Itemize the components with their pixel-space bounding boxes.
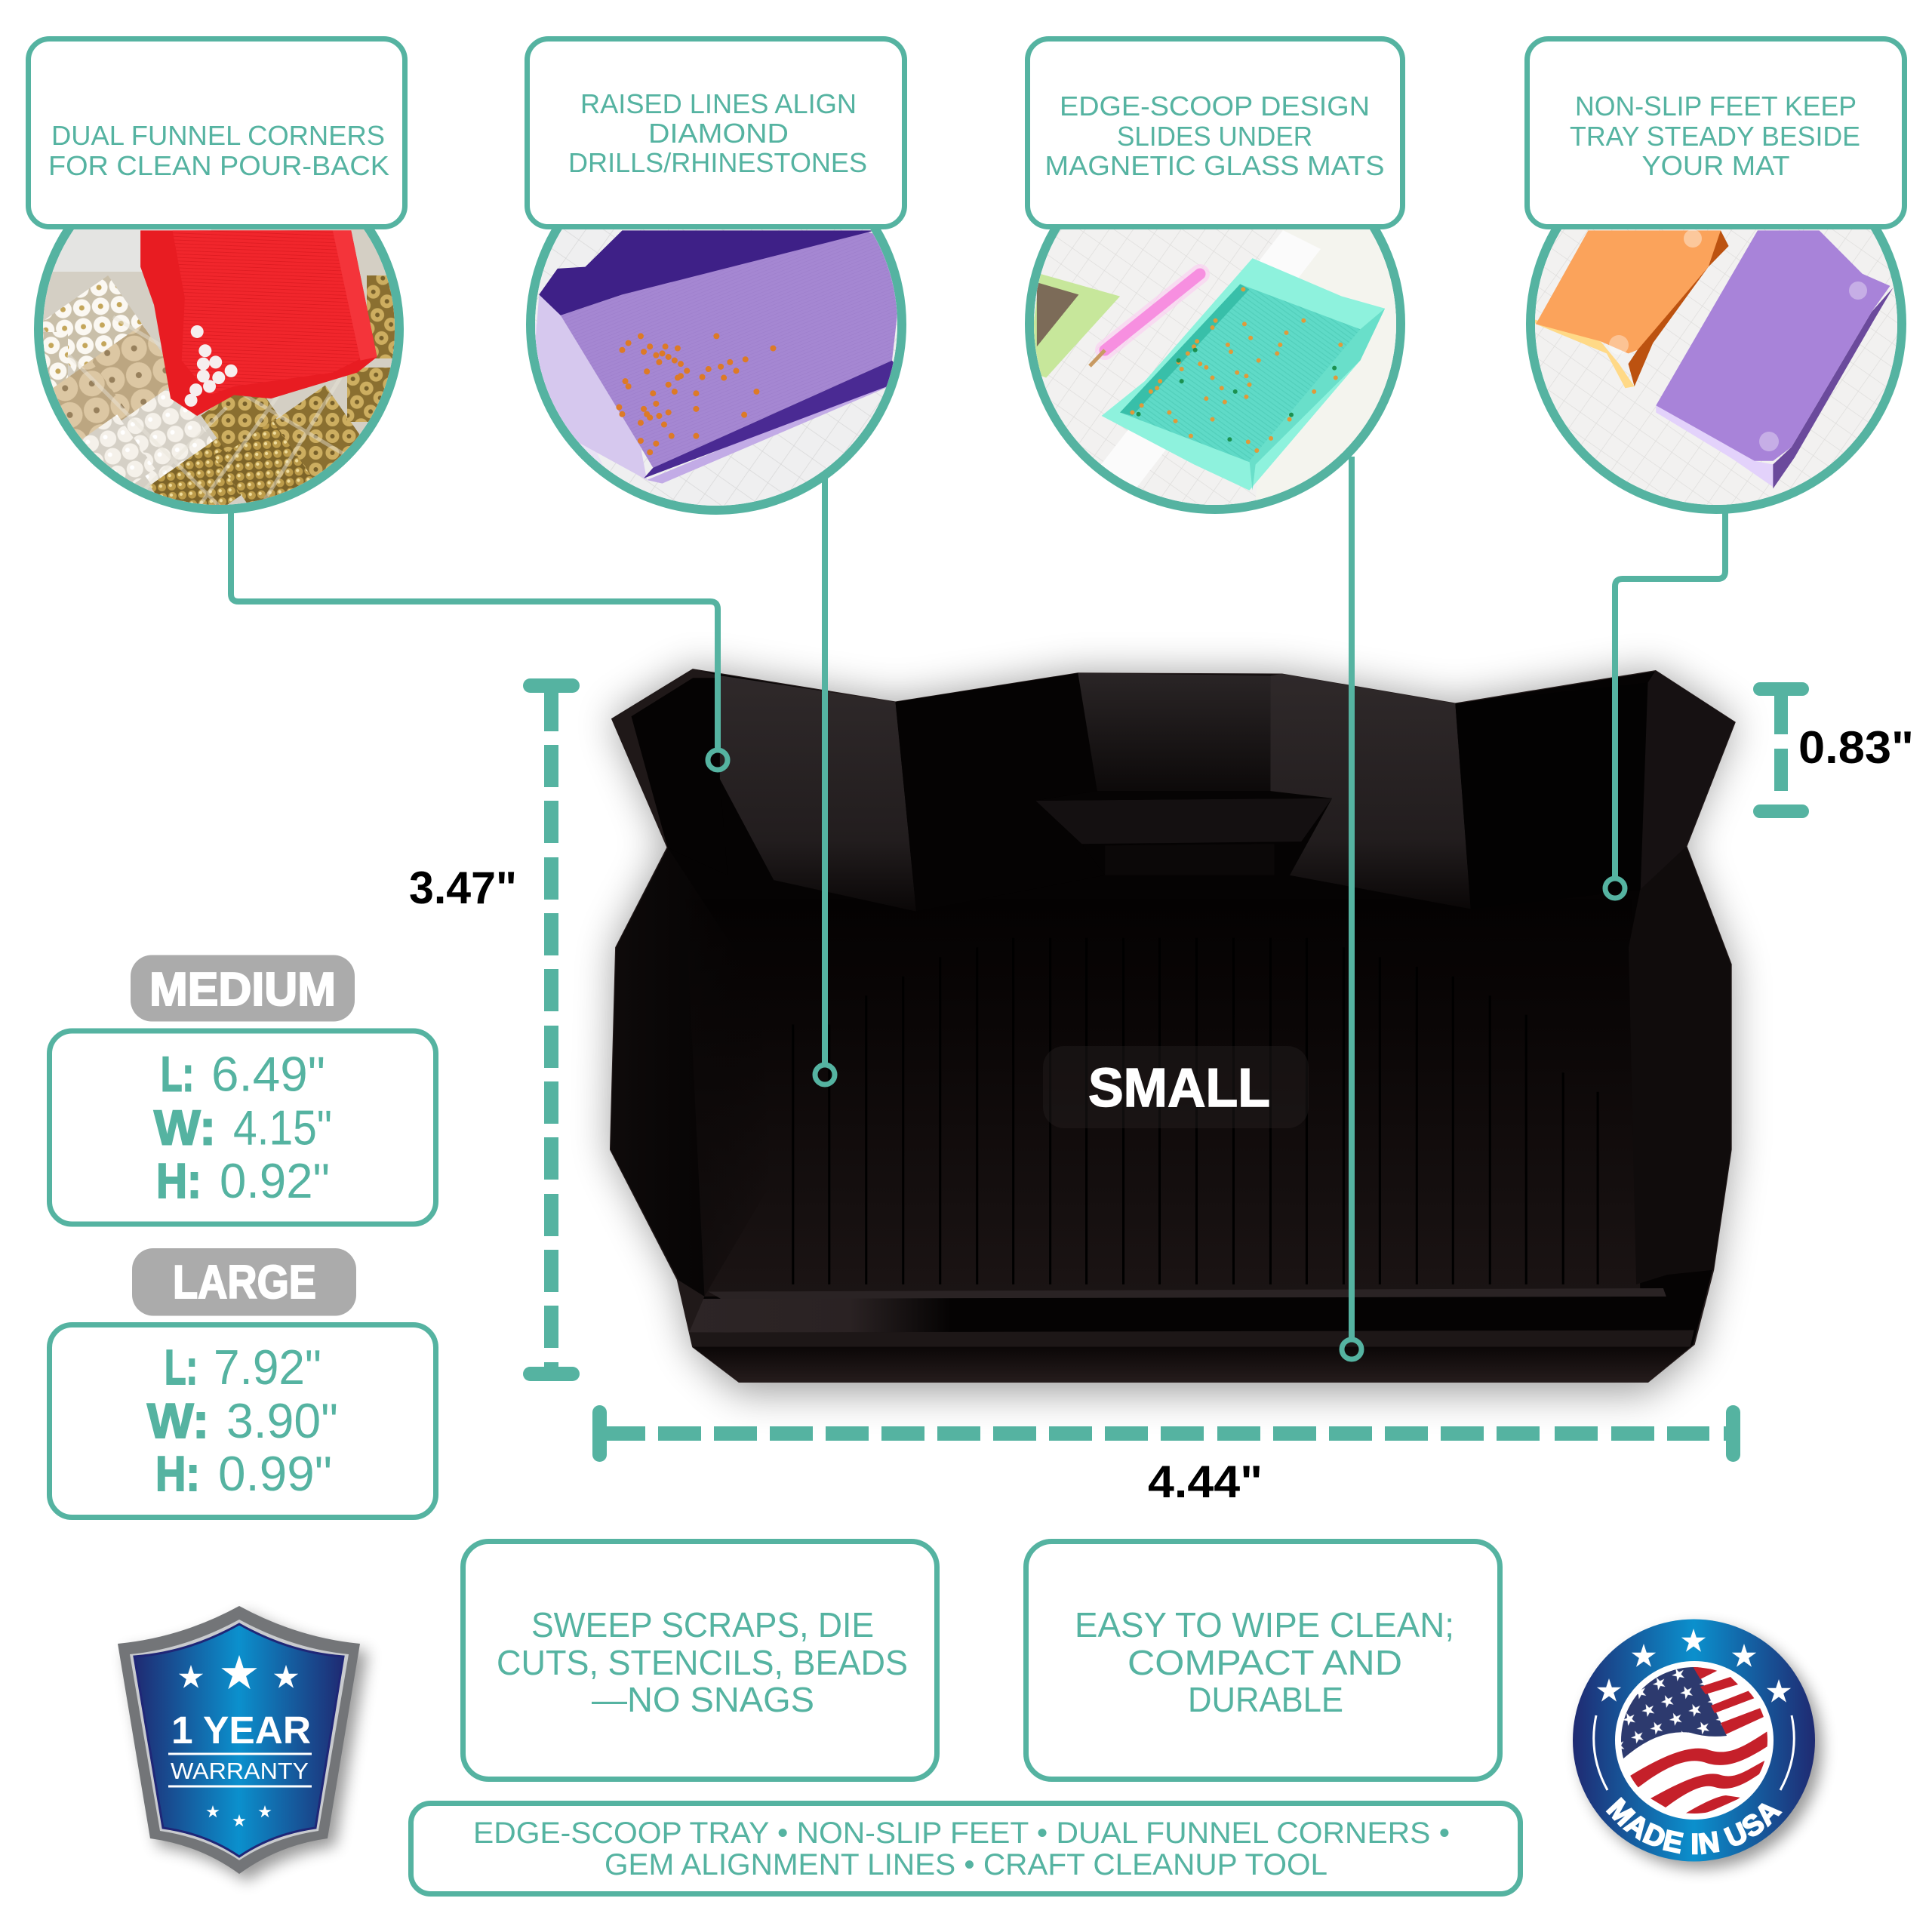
tray left funnel corner bbox=[612, 669, 728, 875]
dimension: width 4.44 in bbox=[592, 1405, 1740, 1507]
panel: medium dimensions: 4.15" bbox=[233, 1100, 332, 1155]
text box: feature summary bbox=[411, 1804, 1520, 1894]
panel: large dimensions: 7.92" bbox=[214, 1340, 321, 1395]
dimension: width 4.44 in: 4.44" bbox=[1148, 1457, 1263, 1507]
badge: made in USA bbox=[1571, 1617, 1832, 1878]
label: SMALL: SMALL bbox=[1088, 1058, 1270, 1118]
panel: medium dimensions: L: bbox=[161, 1046, 194, 1102]
label: SMALL bbox=[1043, 1046, 1309, 1128]
callout: raised lines bbox=[527, 39, 904, 226]
callout: non-slip feet bbox=[1527, 39, 1905, 226]
callout: edge-scoop design: EDGE-SCOOP DESIGN bbox=[1060, 91, 1370, 122]
leader: edge scoop bbox=[1342, 457, 1361, 1359]
product: black small tray bbox=[611, 669, 1735, 1382]
tray floor bbox=[685, 900, 1640, 1297]
text box: easy to wipe clean: COMPACT AND bbox=[1128, 1643, 1402, 1682]
badge: 1 year warranty shield bbox=[118, 1606, 368, 1881]
size tag: medium bbox=[131, 955, 355, 1022]
panel: large dimensions: W: bbox=[147, 1393, 209, 1448]
panel: medium dimensions: W: bbox=[154, 1100, 216, 1155]
text box: easy to wipe clean: EASY TO WIPE CLEAN; bbox=[1075, 1605, 1454, 1644]
badge: 1 year warranty shield: 1 YEAR bbox=[171, 1709, 311, 1752]
dimension: height 3.47 in: 3.47" bbox=[409, 863, 517, 913]
callout: dual funnel corners: DUAL FUNNEL CORNERS bbox=[51, 120, 385, 151]
leader: non-slip feet bbox=[1605, 513, 1725, 898]
tray centre notch bbox=[1035, 798, 1332, 844]
photo: teal tray on glass board bbox=[1025, 229, 1405, 514]
tray back wall bbox=[896, 673, 1105, 912]
badge: 1 year warranty shield: WARRANTY bbox=[171, 1758, 309, 1784]
tray floor alignment lines bbox=[793, 938, 1598, 1284]
text box: easy to wipe clean bbox=[1026, 1541, 1500, 1780]
tray front lip bbox=[709, 1288, 1667, 1303]
callout: non-slip feet: NON-SLIP FEET KEEP bbox=[1575, 91, 1857, 122]
text box: feature summary: GEM ALIGNMENT LINES • CRAFT CLEANUP TOOL bbox=[605, 1848, 1327, 1881]
callout: dual funnel corners: FOR CLEAN POUR-BACK bbox=[48, 150, 389, 181]
panel: large dimensions: H: bbox=[155, 1446, 200, 1501]
callout: raised lines: RAISED LINES ALIGN bbox=[580, 88, 857, 119]
callout: dual funnel corners bbox=[29, 39, 405, 226]
panel: large dimensions: 3.90" bbox=[226, 1393, 338, 1448]
photo: red funnel tray with beads bbox=[34, 229, 404, 514]
leader: raised lines bbox=[815, 478, 835, 1084]
text box: feature summary: EDGE-SCOOP TRAY • NON-SLIP FEET • DUAL FUNNEL CORNERS • bbox=[473, 1817, 1450, 1850]
tray right funnel corner bbox=[1455, 683, 1647, 909]
panel: large dimensions bbox=[50, 1325, 436, 1517]
text box: sweep scraps: CUTS, STENCILS, BEADS bbox=[497, 1643, 908, 1682]
text box: sweep scraps bbox=[463, 1541, 937, 1780]
panel: medium dimensions: 0.92" bbox=[220, 1153, 330, 1208]
callout: edge-scoop design bbox=[1028, 39, 1402, 226]
panel: large dimensions: L: bbox=[165, 1340, 198, 1395]
text box: sweep scraps: SWEEP SCRAPS, DIE bbox=[531, 1605, 874, 1644]
panel: medium dimensions: 6.49" bbox=[211, 1046, 325, 1102]
panel: medium dimensions: H: bbox=[156, 1153, 202, 1208]
size tag: medium: MEDIUM bbox=[149, 964, 336, 1016]
size tag: large bbox=[132, 1248, 356, 1316]
photo: orange and purple trays, underside with non-slip feet bbox=[1526, 229, 1906, 514]
callout: edge-scoop design: MAGNETIC GLASS MATS bbox=[1044, 150, 1384, 181]
dimension: depth 0.83 in bbox=[1753, 682, 1914, 818]
badge: made in USA: MADE IN USA bbox=[1606, 1797, 1783, 1855]
tray shadow bbox=[611, 669, 1735, 1392]
text box: easy to wipe clean: DURABLE bbox=[1188, 1680, 1343, 1719]
callout: non-slip feet: TRAY STEADY BESIDE bbox=[1570, 121, 1860, 152]
leader: funnel corner bbox=[231, 513, 728, 770]
flag bbox=[1615, 1660, 1774, 1823]
callout: non-slip feet: YOUR MAT bbox=[1642, 150, 1790, 181]
panel: large dimensions: 0.99" bbox=[218, 1446, 332, 1501]
size tag: large: LARGE bbox=[173, 1257, 316, 1309]
dimension: depth 0.83 in: 0.83" bbox=[1798, 722, 1914, 773]
photo: purple tray with rhinestones bbox=[526, 229, 906, 515]
tray left wall bbox=[611, 848, 774, 1297]
callout: edge-scoop design: SLIDES UNDER bbox=[1117, 121, 1312, 152]
text box: sweep scraps: —NO SNAGS bbox=[592, 1680, 814, 1719]
dimension: height 3.47 in bbox=[409, 678, 580, 1381]
panel: medium dimensions bbox=[50, 1031, 436, 1224]
callout: raised lines: DRILLS/RHINESTONES bbox=[568, 147, 867, 178]
callout: raised lines: DIAMOND bbox=[648, 118, 789, 149]
